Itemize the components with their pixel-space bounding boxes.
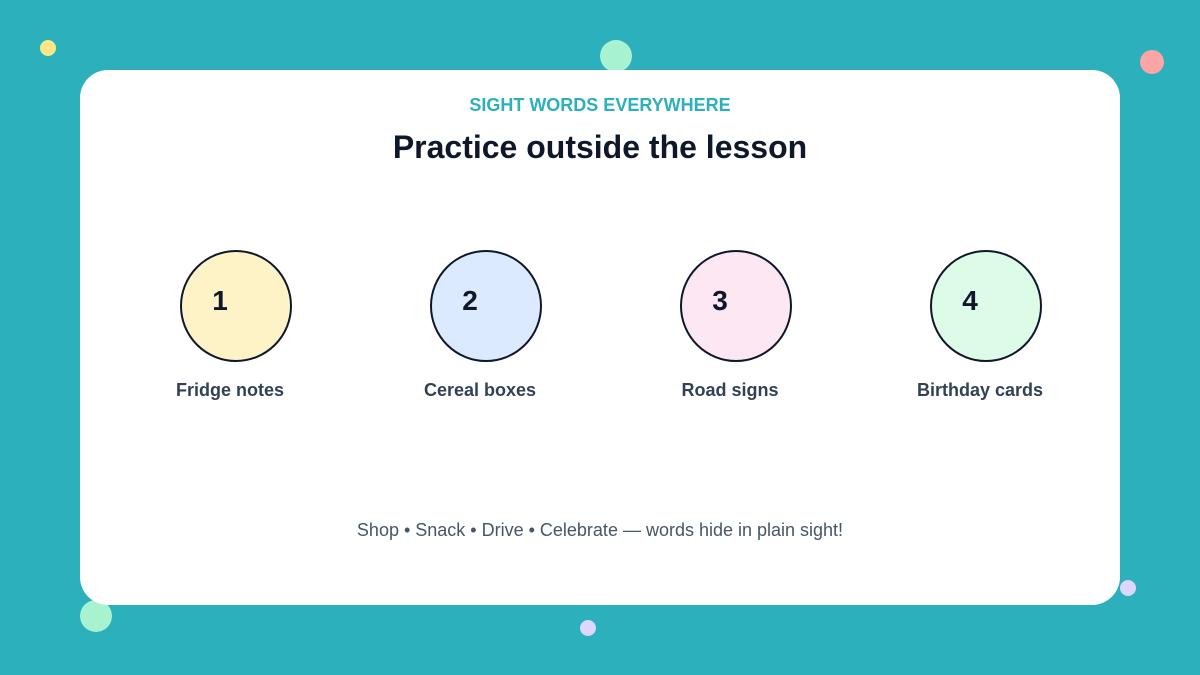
- title: Practice outside the lesson: [393, 129, 807, 165]
- step 2: cereal boxes: 2: [462, 285, 478, 316]
- footer caption: Shop • Snack • Drive • Celebrate — words hide in plain sight!: [357, 520, 843, 540]
- step 4: birthday cards: 4: [962, 285, 978, 316]
- step 4: birthday cards: Birthday cards: [917, 380, 1043, 400]
- eyebrow heading: SIGHT WORDS EVERYWHERE: [469, 95, 731, 115]
- step 3: road signs: 3: [712, 285, 728, 316]
- step 1: fridge notes: Fridge notes: [176, 380, 284, 400]
- step 3: road signs: [680, 250, 792, 400]
- step 1: fridge notes: 1: [212, 285, 228, 316]
- step 3: road signs: Road signs: [681, 380, 778, 400]
- step 4: birthday cards: [917, 250, 1043, 400]
- step 2: cereal boxes: Cereal boxes: [424, 380, 536, 400]
- step 2: cereal boxes: [424, 250, 542, 400]
- step 1: fridge notes: [176, 250, 292, 400]
- panel: main card: [80, 70, 1120, 605]
